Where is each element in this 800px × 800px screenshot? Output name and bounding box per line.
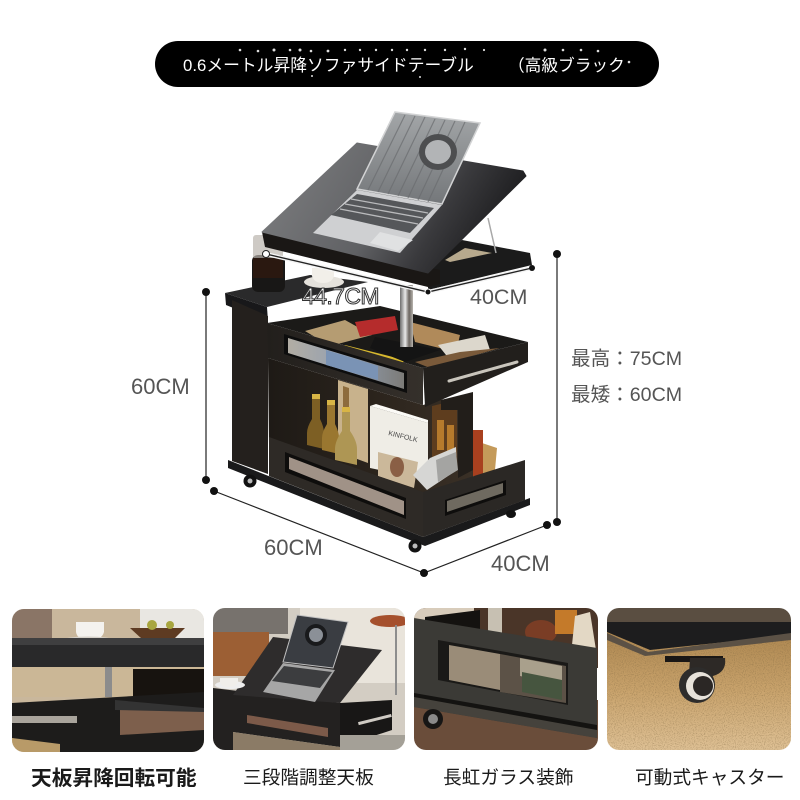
front post xyxy=(441,392,473,478)
dimension label: 60CM height: 60CM xyxy=(131,374,190,399)
dimension label: 44.7CM: 44.7CM xyxy=(302,283,379,309)
dimension label: 40CM top: 40CM xyxy=(470,285,527,309)
dimension label: 60CM base: 60CM xyxy=(264,535,323,560)
photo: rotating lift top xyxy=(12,609,204,752)
photo: three-stage tilt top xyxy=(213,608,410,750)
middle tray interior xyxy=(267,306,528,368)
product: side table xyxy=(225,112,532,552)
dimension line: base width and depth xyxy=(210,487,551,577)
dimension label: 40CM base: 40CM xyxy=(491,551,550,576)
height text: minimum: 最矮：60CM xyxy=(571,384,682,406)
caption: movable casters: 可動式キャスター xyxy=(635,767,784,788)
caption: long glass decoration: 長虹ガラス装飾 xyxy=(443,767,573,788)
middle drawer panels xyxy=(267,323,528,407)
book xyxy=(370,404,458,490)
lift pole xyxy=(400,285,413,347)
coffee and cup on column xyxy=(252,235,344,292)
book: KINFOLK xyxy=(388,430,419,444)
photo: long glass decoration xyxy=(414,608,598,750)
bottles xyxy=(307,394,357,465)
height text: maximum: 最高：75CM xyxy=(571,348,682,370)
lifted table box xyxy=(428,218,532,290)
lower shelf panels and base xyxy=(228,437,530,546)
title suffix: （高級ブラック xyxy=(508,55,625,75)
dimension line: table width and depth xyxy=(262,250,535,295)
tilting table top xyxy=(262,143,526,287)
title banner xyxy=(155,41,659,87)
photo: movable casters xyxy=(607,608,791,750)
side column xyxy=(225,275,368,474)
title text: 0.6メートル昇降ソファサイドテーブル xyxy=(183,55,474,75)
caption: three-stage tilt top: 三段階調整天板 xyxy=(243,767,374,788)
lower shelf interior xyxy=(268,358,497,500)
casters xyxy=(244,474,516,552)
dimension line: right height xyxy=(553,250,561,526)
laptop xyxy=(313,112,480,253)
dimension line: left height xyxy=(202,288,210,484)
caption: rotating lift top: 天板昇降回転可能 xyxy=(31,767,197,790)
